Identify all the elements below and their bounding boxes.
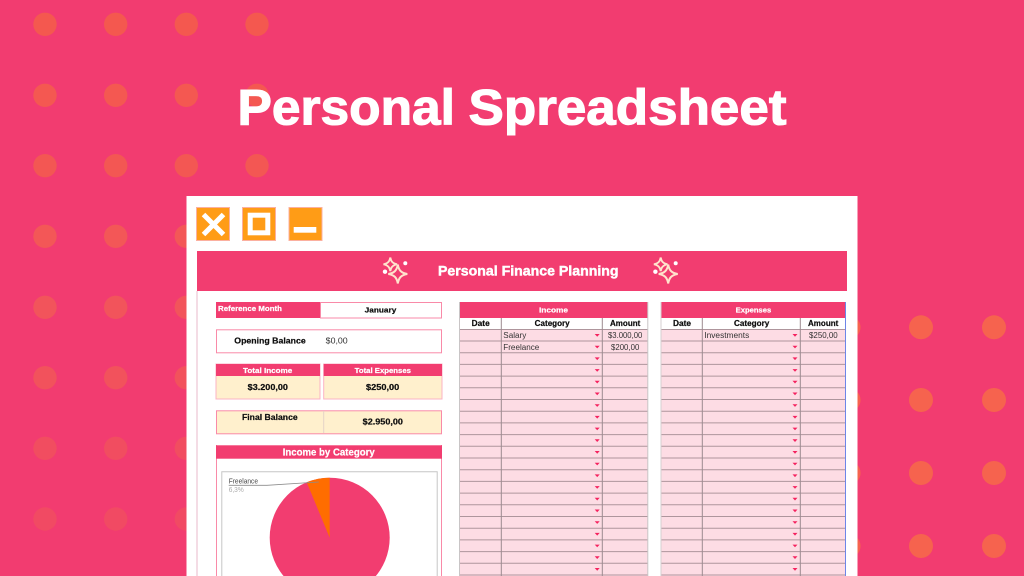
expenses table (661, 302, 846, 576)
expenses table: Date (673, 319, 692, 328)
sheet heading: Personal Finance Planning (438, 262, 618, 278)
income table (460, 302, 648, 576)
icon: sparkles left (383, 258, 407, 284)
pie label (229, 477, 319, 494)
income table: $200,00 (611, 343, 640, 352)
total expenses card: $250,00 (366, 382, 400, 392)
sheet header banner (197, 251, 847, 291)
income table: Category (535, 319, 570, 328)
expenses table: Expenses (736, 305, 771, 314)
reference month row: January (365, 306, 397, 315)
total income card (216, 364, 320, 399)
icon: minimize button (289, 208, 322, 240)
reference month row: Reference Month (218, 304, 282, 313)
income table: Freelance (503, 343, 540, 352)
title: Personal (238, 79, 455, 135)
income by category panel (216, 445, 442, 576)
income table: Salary (503, 331, 526, 340)
total expenses card: Total Expenses (355, 366, 411, 375)
total expenses card (324, 364, 442, 399)
income table: $3.000,00 (608, 331, 643, 340)
income table: Income (539, 305, 568, 314)
pie label: 6,3% (229, 485, 244, 494)
background dots: right grid (836, 315, 1006, 558)
reference month row (216, 302, 442, 318)
opening balance box: $0,00 (326, 336, 348, 346)
icon: close button (196, 208, 230, 240)
total income card: Total Income (243, 366, 292, 375)
expenses table: $250,00 (809, 331, 838, 340)
sheet frame lines (196, 291, 198, 576)
title: Spreadsheet (468, 79, 787, 135)
income table: Amount (610, 319, 641, 328)
opening balance box: Opening Balance (234, 336, 306, 346)
final balance card: Final Balance (242, 412, 298, 422)
background dots: left grid (33, 13, 269, 531)
icon: sparkles right (653, 258, 678, 284)
pie chart (229, 477, 390, 576)
panel heading: Income by Category (283, 447, 375, 458)
window panel (186, 196, 858, 576)
pie label: Freelance (229, 477, 258, 486)
expenses table: Amount (808, 319, 839, 328)
icon: maximize button (242, 208, 276, 240)
expenses table: Investments (704, 331, 749, 340)
panel heading (216, 445, 442, 459)
final balance card: $2.950,00 (363, 417, 403, 427)
total income card: $3.200,00 (248, 382, 288, 392)
income table: Date (472, 319, 490, 328)
final balance card (216, 411, 442, 434)
expenses table: Category (734, 319, 770, 328)
opening balance box (216, 330, 442, 353)
